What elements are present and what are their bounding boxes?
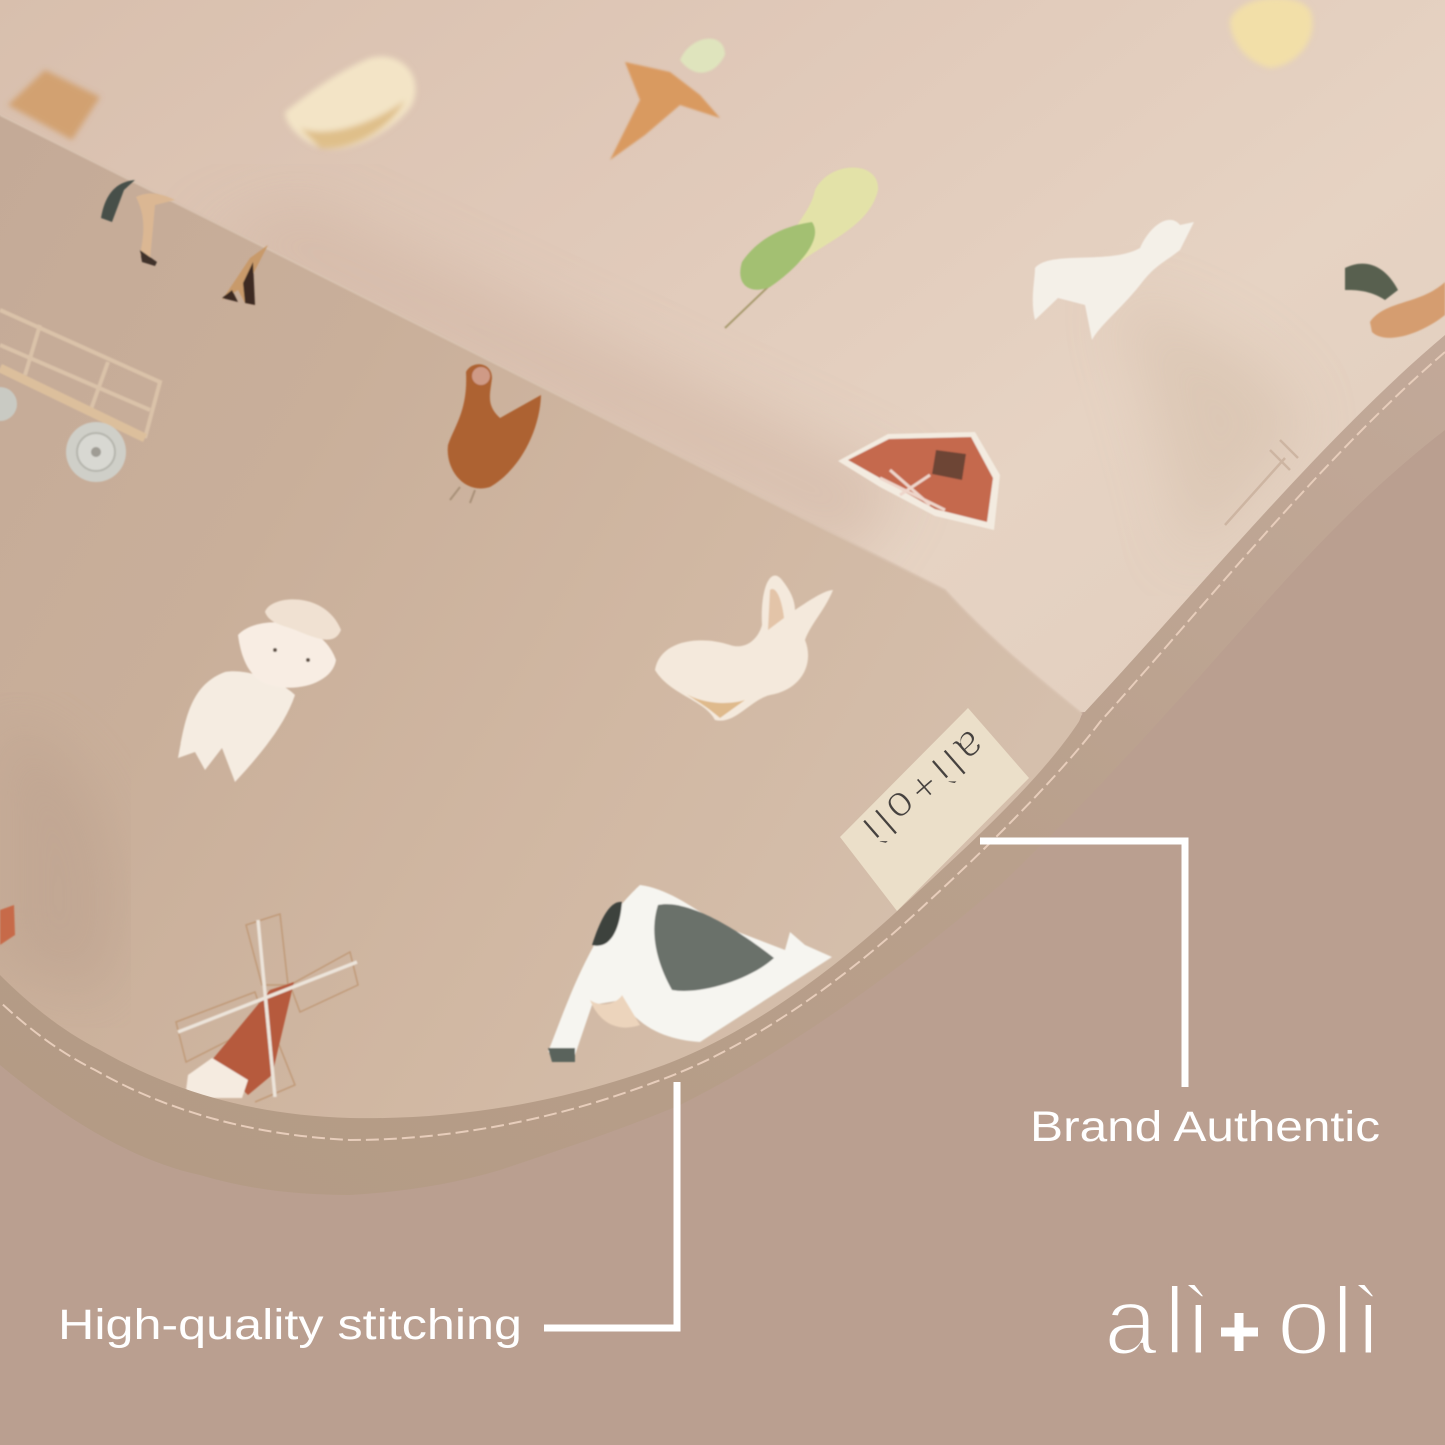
callout: high-quality stitching: High-quality stitching	[58, 1301, 522, 1349]
illustration: rooster head at left edge	[0, 905, 15, 945]
illustration: fork	[1225, 440, 1298, 525]
soft shading on upper panel	[200, 200, 1300, 560]
logo: alì	[1104, 1268, 1212, 1375]
connector: stitching	[544, 1082, 677, 1328]
illustration: chick	[285, 56, 416, 149]
connector: brand authentic	[980, 841, 1185, 1087]
illustration: wagon	[0, 310, 160, 482]
binding edge	[0, 335, 1445, 1195]
illustration: cow	[548, 885, 832, 1062]
callout: brand authentic: Brand Authentic	[1030, 1103, 1380, 1151]
logo plus	[1221, 1313, 1258, 1351]
illustration: hen	[448, 364, 541, 503]
illustration: blurred fox	[8, 70, 100, 140]
stitching	[0, 352, 1445, 1140]
flap edge highlight	[0, 115, 1082, 714]
logo	[1104, 1268, 1382, 1375]
logo: olì	[1277, 1268, 1382, 1375]
illustration: rooster	[1345, 264, 1445, 338]
illustration: blurred duck	[1230, 0, 1313, 68]
illustration: tree	[725, 168, 878, 328]
illustration: animal legs	[101, 180, 268, 305]
illustration: rabbit	[655, 576, 833, 721]
illustration: barn	[838, 432, 1000, 530]
flap shading	[0, 720, 119, 1000]
brand label	[840, 708, 1029, 911]
illustration: windmill	[176, 914, 358, 1102]
bib lower flap	[0, 115, 1082, 1140]
illustration: goat	[1033, 220, 1194, 340]
illustration: sheep	[178, 599, 341, 782]
illustration: scarecrow	[610, 39, 725, 160]
bib upper panel	[0, 0, 1445, 800]
label text: alì+olì	[852, 720, 996, 854]
